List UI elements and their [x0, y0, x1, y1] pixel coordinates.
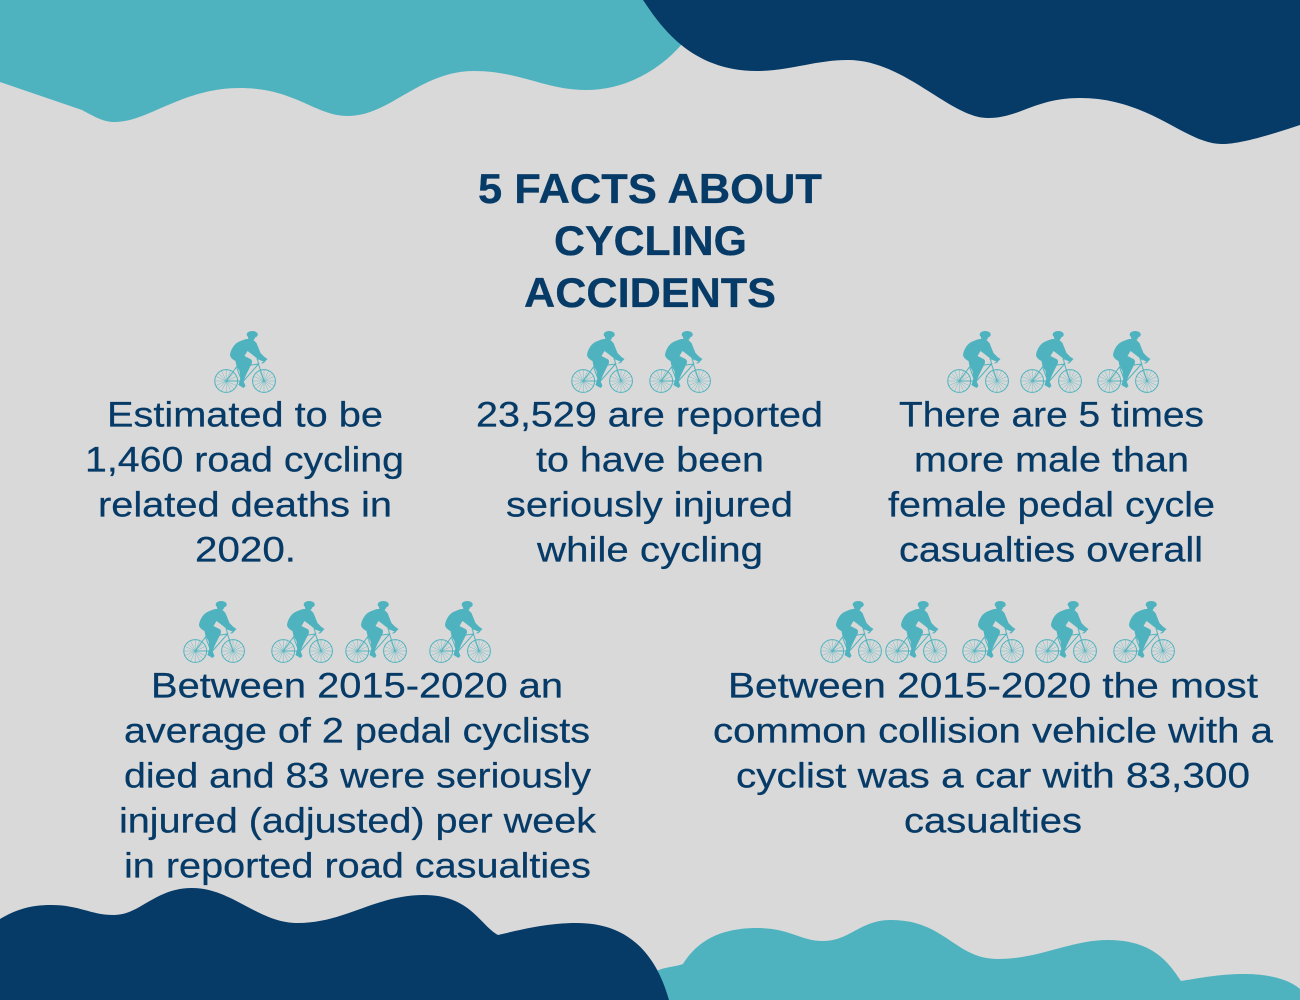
icon: three cyclists — [948, 331, 1158, 392]
fact 4: weekly average — [119, 601, 597, 886]
fact 2 text: 23,529 are reported — [476, 396, 823, 434]
fact 1 text: 2020. — [195, 530, 296, 570]
fact 3: male vs female casualties — [888, 331, 1215, 570]
fact 1 text: Estimated to be — [107, 396, 383, 434]
fact 3 text: There are 5 times — [899, 396, 1204, 434]
icon: two cyclists — [572, 331, 710, 392]
fact 3 text — [888, 396, 1215, 570]
fact 2 text: while cycling — [536, 530, 763, 570]
fact 2 text — [476, 396, 823, 570]
wave: bottom teal — [640, 920, 1300, 1000]
fact 2 text: to have been — [536, 440, 764, 480]
icon: one cyclist — [215, 331, 275, 392]
fact 5 text — [713, 666, 1274, 840]
fact 3 text: casualties overall — [899, 530, 1203, 570]
fact 1: road cycling deaths — [85, 331, 404, 570]
wave: bottom navy — [0, 888, 669, 1000]
fact 5 text: cyclist was a car with 83,300 — [736, 756, 1250, 796]
wave: top navy — [643, 0, 1300, 144]
fact 4 text: died and 83 were seriously — [124, 756, 592, 796]
title: 5 FACTS ABOUT — [478, 165, 822, 212]
title: ACCIDENTS — [524, 269, 776, 316]
fact 5: collision vehicle — [713, 601, 1274, 840]
fact 1 text: related deaths in — [98, 486, 392, 524]
title — [478, 165, 822, 316]
fact 5 text: casualties — [904, 802, 1082, 840]
fact 5 text: Between 2015-2020 the most — [728, 666, 1258, 706]
fact 4 text: Between 2015-2020 an — [151, 666, 563, 706]
fact 2: serious injuries — [476, 331, 823, 570]
icon: five cyclists — [821, 601, 1174, 662]
title: CYCLING — [554, 217, 747, 264]
fact 2 text: seriously injured — [506, 486, 793, 524]
fact 5 text: common collision vehicle with a — [713, 712, 1274, 750]
fact 4 text: injured (adjusted) per week — [119, 802, 597, 840]
fact 4 text — [119, 666, 597, 886]
fact 1 text: 1,460 road cycling — [85, 440, 404, 480]
wave: top teal — [0, 0, 700, 122]
fact 4 text: in reported road casualties — [124, 846, 591, 886]
fact 3 text: female pedal cycle — [888, 486, 1215, 524]
fact 4 text: average of 2 pedal cyclists — [124, 712, 590, 750]
fact 3 text: more male than — [914, 440, 1189, 480]
icon: four cyclists — [184, 601, 490, 662]
fact 1 text — [85, 396, 404, 570]
